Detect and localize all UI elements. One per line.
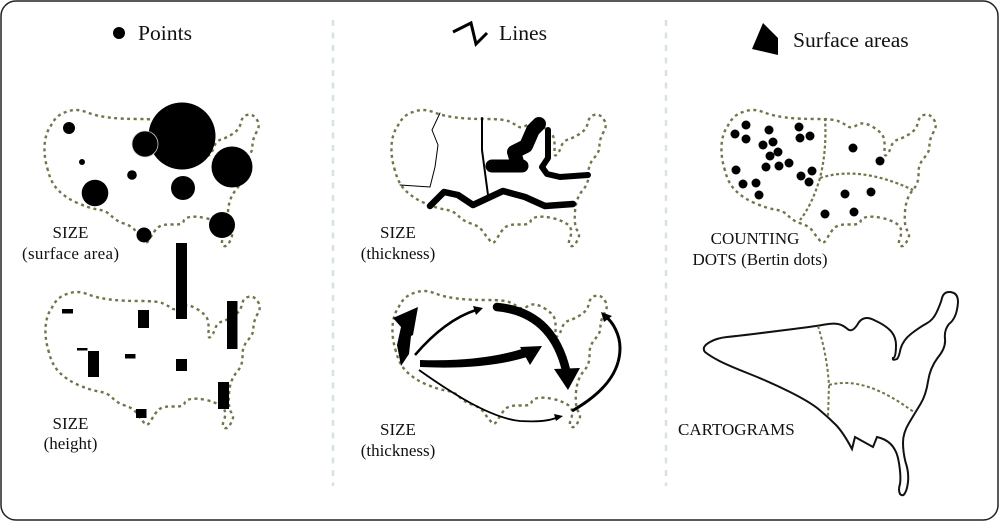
label: size: SIZE	[53, 414, 88, 433]
map: line thickness	[391, 110, 606, 246]
white node	[405, 357, 419, 371]
heading: Surface areas	[752, 23, 909, 55]
map: cartogram	[704, 292, 958, 495]
arrow: thick right	[497, 307, 566, 370]
arrowhead: thin upper	[473, 306, 483, 315]
heading: Points: Points	[138, 21, 192, 45]
heading: Lines	[453, 21, 547, 45]
arrow: thin upper	[415, 310, 476, 355]
arrowhead: east curve	[601, 312, 612, 322]
arrowhead: lower curve	[554, 414, 563, 421]
label: thickness: (thickness)	[361, 244, 435, 263]
label: size: SIZE	[380, 420, 416, 439]
arrowhead: thick right	[554, 368, 580, 390]
heading: Lines: Lines	[499, 21, 547, 45]
label: Bertin dots: DOTS (Bertin dots)	[692, 250, 828, 269]
label: size: SIZE	[380, 223, 416, 242]
label: height: (height)	[44, 434, 97, 453]
label: cartograms: CARTOGRAMS	[678, 420, 795, 439]
arrowhead: thick middle	[520, 346, 542, 365]
arrow: thick left	[393, 307, 418, 366]
label: size surface area: SIZE	[53, 223, 88, 242]
column divider right	[665, 20, 667, 486]
map: size by height	[45, 243, 260, 428]
heading: Points	[113, 21, 192, 45]
arrow: lower curve	[419, 370, 556, 421]
label: counting: COUNTING	[711, 229, 799, 248]
arrow: thick middle	[420, 349, 527, 368]
label: surface area: (surface area)	[22, 244, 119, 263]
heading: Surface areas: Surface areas	[793, 28, 909, 52]
arrow: east curve	[572, 317, 620, 411]
column divider left	[332, 20, 334, 486]
label: thickness: (thickness)	[361, 441, 435, 460]
map: size by surface area	[44, 102, 259, 246]
map: counting dots	[721, 110, 936, 246]
map: flow arrows	[392, 291, 620, 427]
